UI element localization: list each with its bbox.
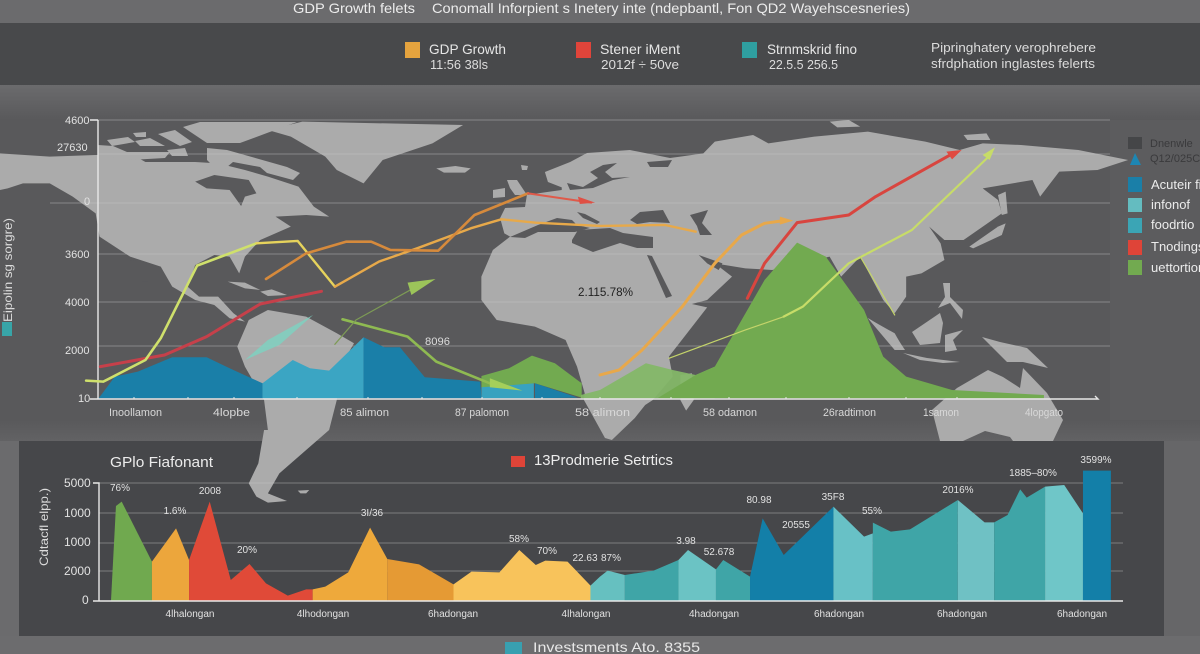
top chart x-axis labels: 87 palomon (455, 407, 509, 419)
legend item: third metric (742, 41, 857, 72)
value labels: 1885–80% (1009, 468, 1057, 479)
legend swatches and labels: foodrtio (1151, 217, 1194, 232)
top chart y-axis labels: 2000 (65, 345, 89, 357)
legend item: GDP growth: 11:56 38ls (430, 57, 488, 72)
value labels: 87% (601, 553, 621, 564)
legend item: third metric: 22.5.5 256.5 (769, 57, 838, 72)
line: orange long (335, 219, 696, 287)
title: GDP Growth felets (293, 0, 415, 16)
top chart y-axis labels: 10 (78, 393, 90, 405)
value labels: 20% (237, 545, 257, 556)
top chart y-axis labels: 3600 (65, 249, 89, 261)
map: Americas (0, 122, 471, 430)
callout: green value: 8096 (425, 336, 450, 348)
bottom chart y-axis labels: 5000 (64, 476, 91, 490)
line: lime asia (784, 147, 995, 317)
value labels: 3.98 (676, 536, 696, 547)
value labels: 58% (509, 534, 529, 545)
map: Eurasia and Africa (481, 120, 1128, 440)
map: Canadian arctic islands (98, 122, 300, 180)
map: British Isles (493, 165, 528, 198)
value labels: 1.6% (164, 506, 187, 517)
legend item: sentiment (576, 41, 680, 72)
value labels: 2008 (199, 486, 222, 497)
top chart x-axis labels: 58 odamon (703, 407, 757, 419)
value labels: 20555 (782, 520, 810, 531)
bottom area chart left segments (111, 502, 591, 601)
top chart x-axis labels: 4lopbe (213, 407, 250, 419)
right legend (1128, 137, 1200, 275)
legend header: Q12/025C (1150, 153, 1200, 165)
top chart x-axis labels: 1samon (923, 407, 959, 419)
callout: centre value: 2.115.78% (578, 285, 633, 299)
top chart x-axis labels (109, 407, 1063, 419)
map: Southeast Asia islands (868, 283, 1048, 368)
value labels: 35F8 (822, 492, 845, 503)
top chart x-axis labels: 4lopgato (1025, 407, 1063, 419)
bottom chart y-axis title: Cdtacfl elpp.) (37, 488, 51, 566)
bottom chart y-axis labels: 1000 (64, 506, 91, 520)
bottom chart gridlines (99, 483, 1123, 571)
legend item: GDP growth: GDP Growth (429, 41, 506, 57)
top chart y-axis labels (57, 115, 90, 405)
legend note: Pipringhatery verophrebere (931, 40, 1096, 55)
bottom chart x-axis labels: 6hadongan (428, 609, 478, 620)
top chart gridlines (50, 120, 1110, 346)
top chart axes (90, 120, 1098, 399)
bottom chart y-axis labels: 1000 (64, 535, 91, 549)
legend note (931, 40, 1096, 71)
arrow: red europe (528, 193, 595, 204)
top chart x-axis labels: 58 alimon (575, 407, 630, 419)
legend swatches and labels: infonof (1151, 197, 1190, 212)
bottom chart x-axis labels: 4hadongan (689, 609, 739, 620)
top chart y-axis labels: 27630 (57, 142, 88, 154)
bottom chart x-axis labels: 4lhalongan (166, 609, 214, 620)
top chart y-axis labels: 4000 (65, 297, 89, 309)
bottom chart y-axis labels: 2000 (64, 564, 91, 578)
area chart: blue and teal segments (99, 337, 582, 398)
bottom chart axes (93, 483, 1123, 601)
panel legend: 13Prodmerie Setrtics (534, 453, 673, 469)
title: Conomall Inforpient s Inetery inte (ndepbantl, Fon QD2 Wayehscesneries) (432, 0, 910, 16)
map: South America tip (249, 430, 329, 503)
panel: top legend band (0, 23, 1200, 85)
panel title: GPlo Fiafonant (110, 454, 214, 471)
y-axis title with teal marker: Eipolin sg sorgre) (1, 218, 15, 322)
top chart x-axis labels: Inoollamon (109, 407, 162, 419)
world map (0, 120, 1128, 441)
trend lines and arrows (86, 193, 696, 391)
map: Australia (932, 368, 1063, 441)
bottom chart x-axis labels: 6hadongan (1057, 609, 1107, 620)
line: dark orange (266, 193, 528, 279)
legend header: Dnenwle (1150, 138, 1193, 150)
legend note: sfrdphation inglastes felerts (931, 56, 1096, 71)
legend item: third metric: Strnmskrid fino (767, 41, 857, 57)
value labels: 76% (110, 483, 130, 494)
top chart x-axis labels: 85 alimon (340, 407, 389, 419)
line: orange curve (600, 217, 793, 375)
legend swatches and labels (1128, 177, 1200, 275)
line: thin olive (669, 317, 784, 358)
bottom area chart right segments (590, 471, 1111, 601)
panel: bottom chart (19, 430, 1164, 636)
bottom chart x-axis labels: 4lhodongan (297, 609, 349, 620)
bottom chart x-axis labels (166, 609, 1107, 620)
value labels: 3I/36 (361, 508, 384, 519)
legend header (1128, 137, 1200, 165)
top chart x-axis labels: 26radtimon (823, 407, 876, 419)
legend item: sentiment: 2012f ÷ 50ve (601, 57, 679, 72)
value labels: 52.678 (704, 547, 735, 558)
legend item: sentiment: Stener iMent (600, 41, 680, 57)
top chart y-axis labels: 0 (84, 196, 90, 208)
value labels (110, 455, 1112, 564)
top chart y-axis labels: 4600 (65, 115, 89, 127)
line: red americas (100, 291, 321, 367)
line: thin branch (860, 257, 895, 315)
arrow: pale teal (245, 315, 313, 360)
value labels: 22.63 (572, 553, 598, 564)
line: green with arrow (343, 319, 522, 391)
value labels: 70% (537, 546, 557, 557)
bottom chart x-axis labels: 4lhalongan (562, 609, 610, 620)
bottom chart x-axis labels: 6hadongan (814, 609, 864, 620)
area chart: green mountain (581, 243, 1044, 398)
bottom chart y-axis labels (64, 476, 91, 607)
map: seas of Europe (510, 160, 712, 298)
value labels: 80.98 (746, 495, 772, 506)
value labels: 3599% (1080, 455, 1112, 466)
line: red asia (747, 150, 962, 298)
arrow: olive up (335, 279, 436, 344)
legend item: GDP growth (405, 41, 506, 72)
line: lime to yellow (86, 243, 256, 382)
value labels: 55% (862, 506, 882, 517)
value labels: 2016% (942, 485, 974, 496)
line: yellow segment (256, 241, 335, 287)
bottom chart y-axis labels: 0 (82, 593, 89, 607)
bottom chart x-axis labels: 6hadongan (937, 609, 987, 620)
